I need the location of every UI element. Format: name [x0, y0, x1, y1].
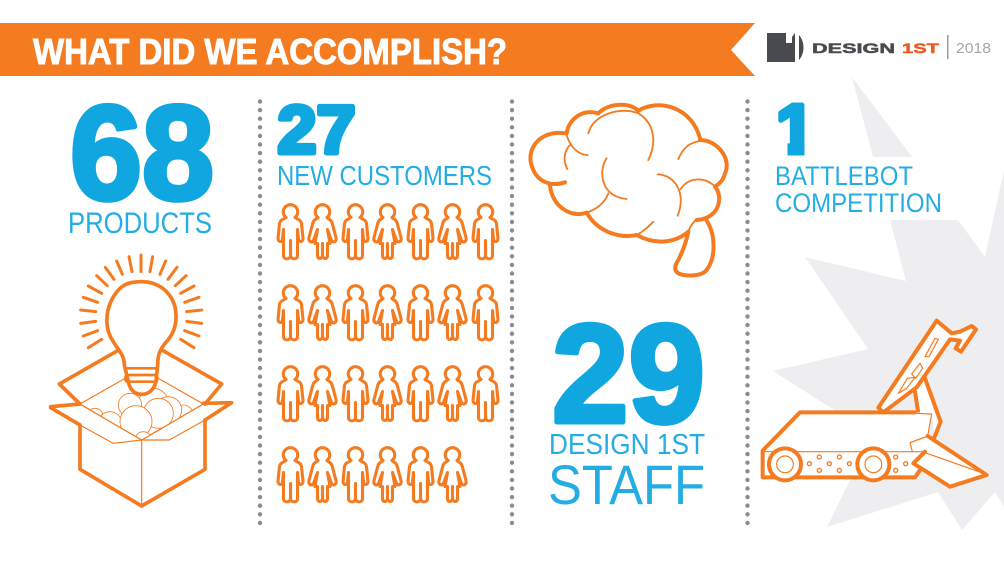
icon: light bulb rising from box — [51, 255, 232, 506]
icon: brain — [530, 105, 727, 276]
logo: Design 1st 2018: 2018 — [956, 40, 991, 57]
dotted column dividers — [260, 102, 748, 523]
stat: 27 new customers — [277, 92, 492, 191]
stat: 29 Design 1st staff — [548, 295, 705, 516]
stat: 1 battlebot competition — [776, 102, 940, 212]
background: grey explosion burst — [773, 77, 1004, 530]
stat: 27 new customers: NEW CUSTOMERS — [277, 160, 492, 191]
stat: 1 battlebot competition: BATTLEBOT — [775, 161, 913, 191]
stat: 1 battlebot competition: 1 — [776, 90, 815, 168]
logo: Design 1st 2018 — [767, 33, 991, 62]
stat: 1 battlebot competition: COMPETITION — [775, 188, 942, 218]
stat: 68 products: 68 — [70, 79, 214, 228]
header banner — [0, 23, 755, 76]
stat: 29 Design 1st staff: STAFF — [548, 453, 705, 516]
stat: 27 new customers: 27 — [278, 92, 356, 168]
logo: Design 1st 2018: DESIGN — [812, 40, 895, 56]
icon: battlebot robot — [763, 321, 987, 487]
title: WHAT DID WE ACCOMPLISH? — [33, 31, 507, 72]
stat: 68 products: PRODUCTS — [68, 207, 212, 240]
logo: Design 1st 2018: 1ST — [902, 40, 940, 56]
icon: grid of 27 people — [278, 205, 498, 502]
stat: 29 Design 1st staff: DESIGN 1ST — [549, 429, 705, 461]
stat: 29 Design 1st staff: 29 — [552, 295, 705, 452]
